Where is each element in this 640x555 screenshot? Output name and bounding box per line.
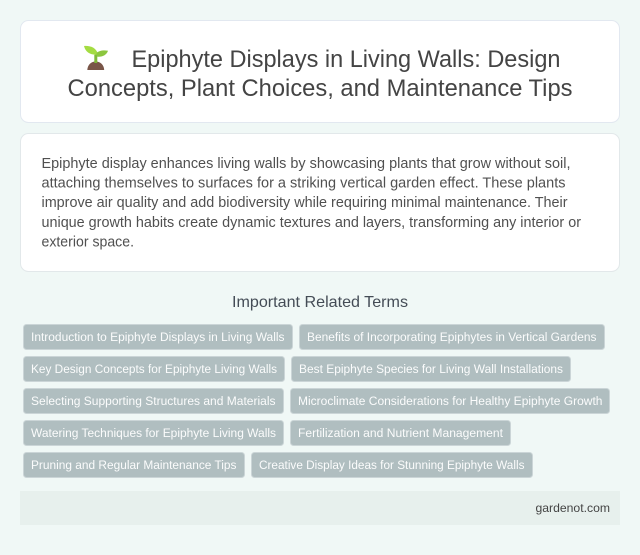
tag: microclimate [290,388,610,414]
title [68,46,572,102]
description text: Epiphyte display enhances living walls by showcasing plants that grow without soil, [42,156,570,172]
tag: structures [24,388,284,414]
tag: microclimate: Microclimate Considerations for Healthy Epiphyte Growth [298,394,603,408]
tag: structures: Selecting Supporting Structures and Materials [31,394,276,408]
description text: unique growth habits create dynamic textures and layers, transforming any interior or [42,215,581,231]
tag: benefits [300,324,604,350]
tag: fertilization [290,420,510,446]
tag: watering: Watering Techniques for Epiphyte Living Walls [31,426,276,440]
panel: description [20,134,620,272]
tag: species [292,356,570,382]
footer source text: gardenot.com [536,501,610,515]
tag: creative display: Creative Display Ideas for Stunning Epiphyte Walls [259,458,524,472]
description text [42,156,581,250]
tag: creative display [252,452,532,478]
panel: header [20,20,620,122]
description text: improve air quality and add biodiversity while requiring minimal maintenance. Their [42,195,568,211]
tag: design concepts: Key Design Concepts for Epiphyte Living Walls [31,362,277,376]
description text: exterior space. [42,234,134,250]
tag: design concepts [24,356,284,382]
tag: fertilization: Fertilization and Nutrient Management [298,426,504,440]
tag: watering [24,420,284,446]
panel: footer [20,491,620,525]
tag: benefits: Benefits of Incorporating Epiphytes in Vertical Gardens [307,330,596,344]
tag: species: Best Epiphyte Species for Living Wall Installations [299,362,563,376]
heading: related terms: Important Related Terms [232,294,408,311]
tag: introduction: Introduction to Epiphyte Displays in Living Walls [31,330,284,344]
icon: sprout [84,46,108,70]
tag: pruning: Pruning and Regular Maintenance Tips [31,458,236,472]
title: Concepts, Plant Choices, and Maintenance Tips [68,75,572,102]
tag: introduction [24,324,292,350]
tag: pruning [24,452,244,478]
title: Epiphyte Displays in Living Walls: Design [132,46,560,73]
panel: related term tags [24,324,610,478]
description text: attaching themselves to surfaces for a striking vertical garden effect. These plants [42,176,566,192]
